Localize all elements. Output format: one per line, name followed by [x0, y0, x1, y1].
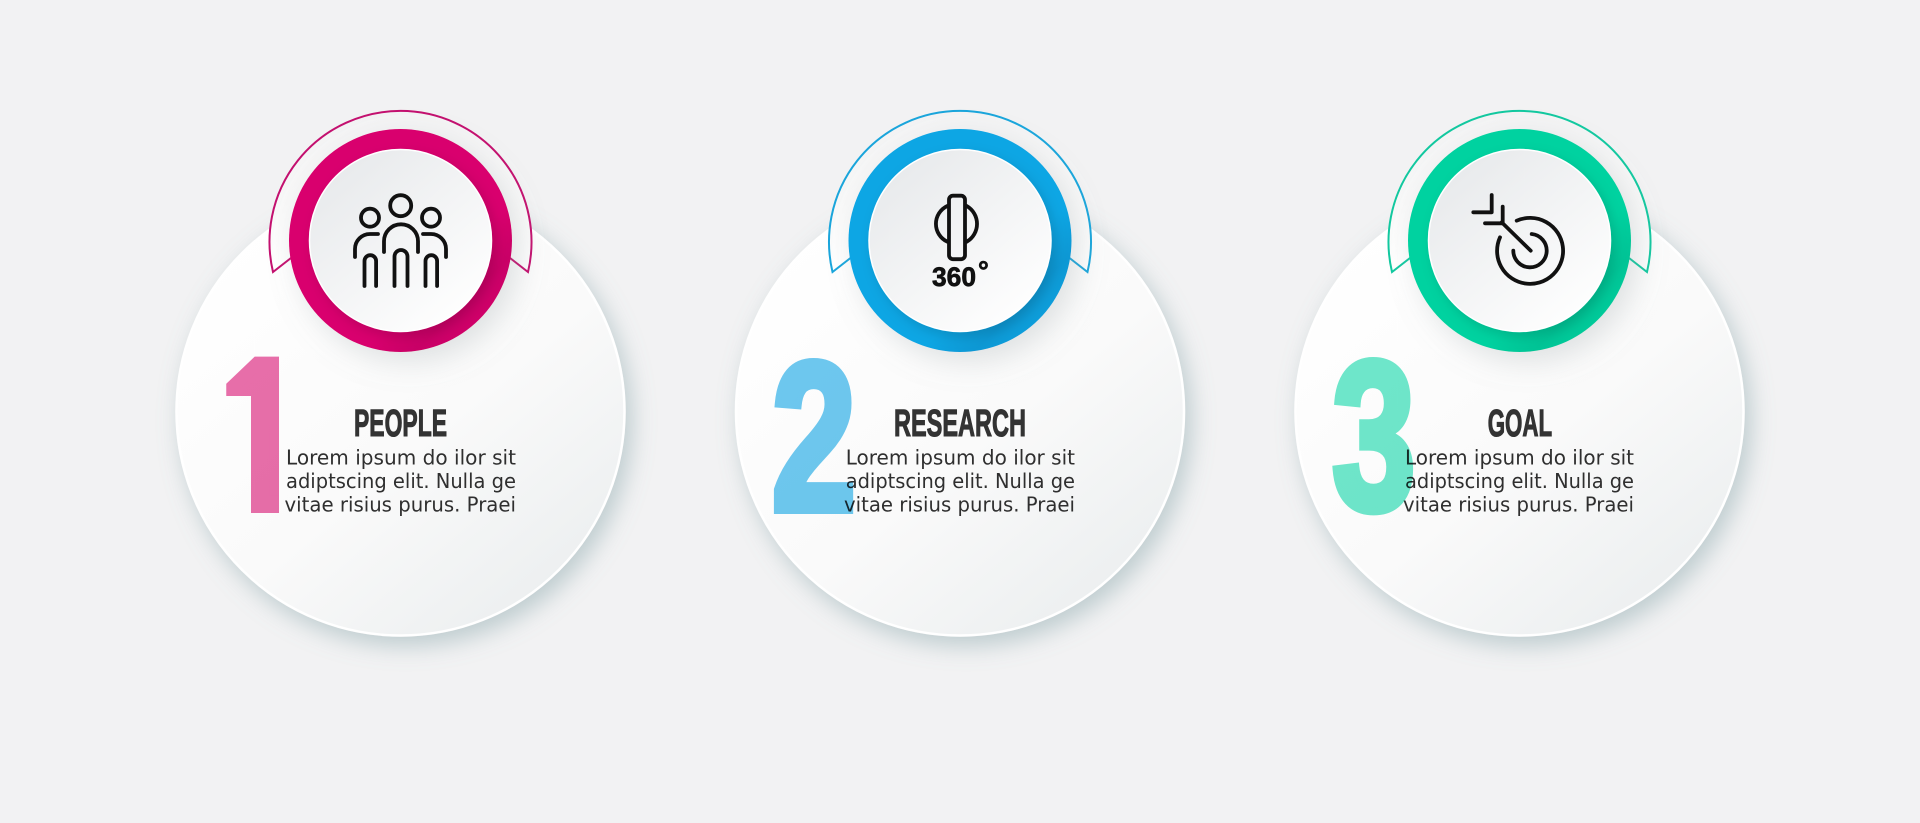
body text: goal — [1403, 446, 1634, 516]
icon: 360 phone: ° — [978, 256, 989, 286]
body text: research — [844, 446, 1075, 516]
heading: people: PEOPLE — [354, 403, 447, 445]
inner disc 2 — [869, 150, 1051, 332]
icon: 360 phone — [932, 196, 989, 292]
heading: goal: GOAL — [1488, 403, 1552, 445]
body text: goal: Lorem ipsum do ilor sit — [1405, 446, 1634, 470]
body text: people — [284, 446, 516, 516]
number 1: 1 — [222, 319, 302, 556]
ring 1 — [289, 129, 512, 352]
body text: research: vitae risius purus. Praei — [844, 492, 1075, 516]
ring 2 — [848, 129, 1072, 352]
number 2: 2 — [772, 319, 856, 556]
body text: goal: adiptscing elit. Nulla ge — [1405, 469, 1634, 493]
body text: people: adiptscing elit. Nulla ge — [286, 469, 516, 493]
infographic canvas — [170, 110, 1762, 657]
number 3: 3 — [1332, 318, 1416, 554]
icon: people — [355, 195, 446, 286]
ribbon arc 3 — [1388, 111, 1650, 272]
icon: 360 phone: 360 — [932, 262, 976, 292]
heading: research: RESEARCH — [894, 403, 1026, 445]
large disc 1 — [176, 188, 624, 636]
body text: people: vitae risius purus. Praei — [284, 492, 516, 516]
panel: research — [736, 111, 1184, 635]
body text: research: adiptscing elit. Nulla ge — [846, 469, 1075, 493]
body text: people: Lorem ipsum do ilor sit — [286, 446, 516, 470]
panel: people — [176, 111, 624, 635]
ribbon arc 1 — [270, 111, 532, 272]
ring 3 — [1408, 129, 1631, 352]
large disc 3 — [1296, 188, 1744, 636]
body text: goal: vitae risius purus. Praei — [1403, 492, 1634, 516]
panel: goal — [1296, 111, 1744, 636]
inner disc 3 — [1428, 150, 1610, 332]
body text: research: Lorem ipsum do ilor sit — [846, 446, 1075, 470]
icon: target — [1473, 195, 1563, 284]
inner disc 1 — [310, 150, 492, 332]
ribbon arc 2 — [829, 111, 1091, 272]
large disc 2 — [736, 188, 1184, 636]
